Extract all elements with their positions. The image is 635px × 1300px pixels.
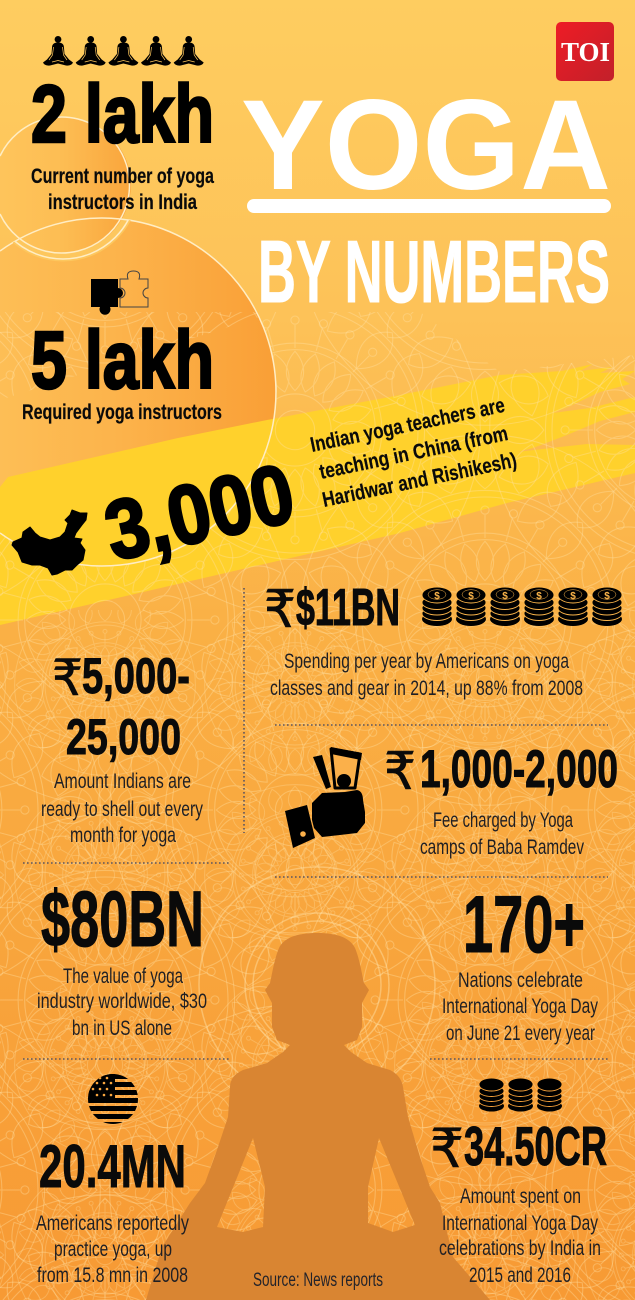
- caption: amount Indians: ready to shell out every: [41, 798, 203, 821]
- caption: teachers in China: [308, 394, 519, 512]
- icon: puzzle pieces: [91, 271, 148, 315]
- number: 5 lakh: 5 lakh: [31, 315, 214, 406]
- number: 34.50CR: [430, 1115, 607, 1179]
- panel: circle backdrop: [24, 118, 276, 450]
- panel: 170+ nations: [442, 880, 598, 1045]
- icon: six coin stacks: $: [434, 591, 440, 602]
- caption: fee: Fee charged by Yoga: [433, 809, 573, 832]
- caption: industry value: [37, 965, 207, 1040]
- caption: Americans: practice yoga, up: [54, 1238, 172, 1261]
- caption: current instructors: instructors in India: [48, 191, 197, 214]
- caption: amount Indians: Amount Indians are: [54, 770, 191, 793]
- column dividers: [23, 588, 608, 1059]
- panel: 11BN spending: [264, 579, 622, 700]
- caption: amount spent: 2015 and 2016: [469, 1264, 571, 1287]
- panel: 3,000 teachers in China: [12, 394, 519, 578]
- panel: 20.4MN: [36, 1074, 189, 1287]
- caption: nations: Nations celebrate: [458, 969, 583, 992]
- number: 11BN: $11BN: [296, 579, 400, 637]
- caption: industry value: The value of yoga: [63, 965, 183, 988]
- number: 2 lakh: 2 lakh: [31, 69, 214, 160]
- caption: current instructors: Current number of yoga: [31, 165, 214, 188]
- caption: industry value: bn in US alone: [72, 1017, 172, 1040]
- number: 11BN: ₹: [264, 581, 296, 639]
- caption: required instructors: Required yoga instructors: [22, 401, 222, 424]
- caption: teachers in China: Haridwar and Rishikesh): [320, 449, 519, 512]
- icon: six coin stacks: $: [570, 591, 576, 602]
- caption: amount spent: [439, 1185, 601, 1287]
- panel: 34.50CR spent: [430, 1078, 607, 1287]
- number: 5,000-25,000: 5,000-: [82, 648, 190, 704]
- caption: industry value: industry worldwide, $30: [37, 990, 207, 1013]
- logo: TOI: TOI: [561, 37, 610, 67]
- yellow brush band: [0, 364, 635, 625]
- caption: nations: [442, 969, 598, 1045]
- icon: fist with banknotes: [285, 747, 365, 848]
- panel: 5 lakh: [22, 271, 222, 424]
- caption: Americans: [36, 1212, 189, 1287]
- caption: Americans: from 15.8 mn in 2008: [37, 1264, 188, 1287]
- icon: six coin stacks: $: [502, 591, 508, 602]
- number: 5,000-25,000: ₹: [52, 650, 83, 706]
- number: 11BN: [264, 579, 400, 639]
- number: 1,000-2,000: ₹: [384, 743, 416, 801]
- caption: amount Indians: month for yoga: [70, 824, 176, 847]
- title: YOGA: [241, 74, 611, 217]
- panel: camp fee: [285, 740, 618, 859]
- caption: teachers in China: teaching in China (from: [317, 422, 510, 484]
- mandala background pattern: [0, 312, 635, 1300]
- caption: spending: [270, 650, 583, 700]
- caption: current instructors: [31, 165, 214, 214]
- icon: three coin stacks: [479, 1078, 562, 1112]
- caption: amount spent: Amount spent on: [460, 1185, 581, 1208]
- panel: 2 lakh: [31, 36, 214, 214]
- icon: six coin stacks: $: [468, 591, 474, 602]
- icon: map of China: [12, 510, 87, 575]
- number: 5,000-25,000: [52, 648, 190, 765]
- panel: 80BN: [37, 874, 207, 1040]
- number: 34.50CR: ₹: [430, 1119, 464, 1179]
- icon: six coin stacks: [422, 587, 622, 626]
- icon: US flag circle: [88, 1074, 138, 1125]
- source note: Source: News reports: [253, 1270, 383, 1291]
- number: 80BN: $80BN: [41, 874, 204, 963]
- circle outlines: [0, 110, 276, 566]
- caption: teachers in China: Indian yoga teachers are: [308, 394, 507, 457]
- caption: Americans: Americans reportedly: [36, 1212, 189, 1235]
- number: 20.4MN: 20.4MN: [39, 1133, 186, 1200]
- panel: 5,000-25,000: [41, 648, 203, 847]
- icon: five meditating figures: [43, 36, 204, 66]
- title: [241, 74, 611, 321]
- number: 3,000: 3,000: [97, 446, 302, 578]
- logo: TOI: [556, 22, 614, 81]
- icon: six coin stacks: $: [536, 591, 542, 602]
- icon: six coin stacks: $: [604, 591, 610, 602]
- caption: fee: [420, 809, 584, 859]
- meditating silhouette: [146, 933, 490, 1300]
- number: 5,000-25,000: 25,000: [66, 709, 181, 765]
- caption: amount Indians: [41, 770, 203, 847]
